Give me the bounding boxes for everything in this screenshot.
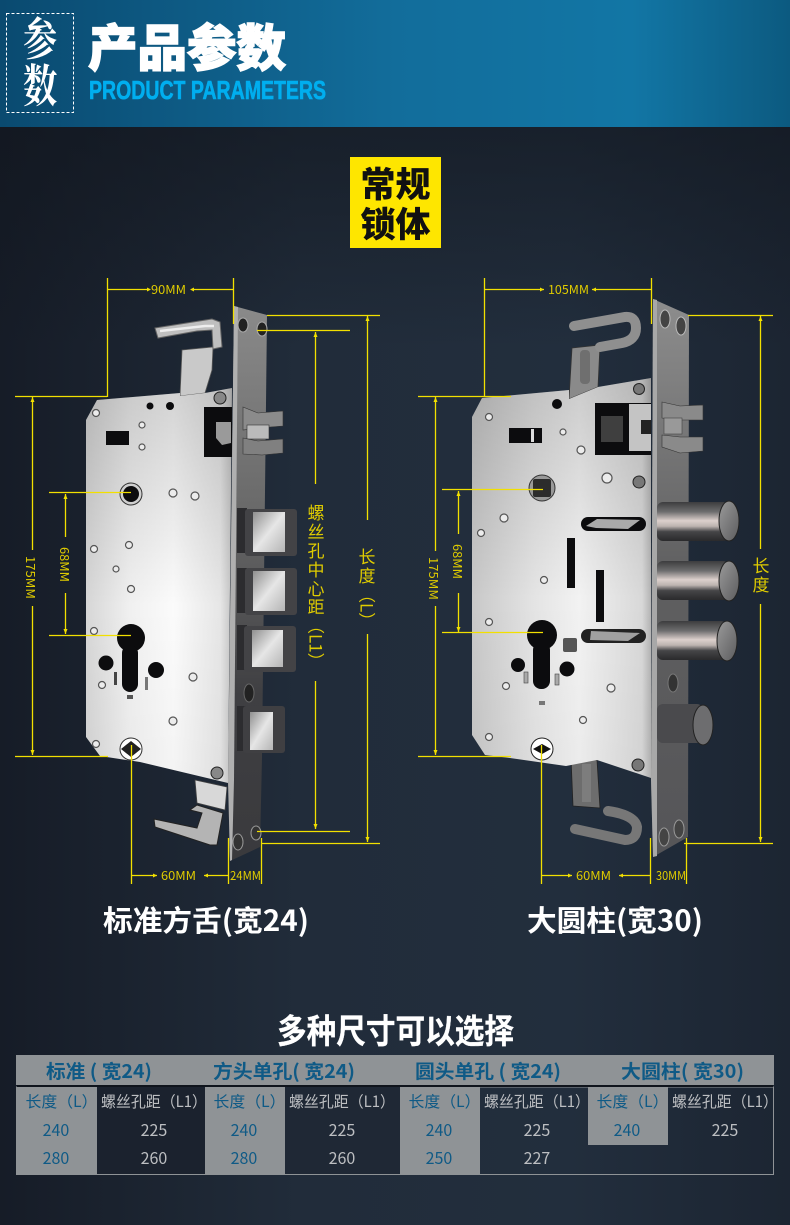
label: L: （L） (356, 586, 380, 629)
section heading: 多种尺寸可以选择 (277, 1004, 514, 1053)
faceplate screw holes (659, 310, 686, 846)
label: L1: 螺 (308, 499, 324, 524)
label: L1: 距 (308, 593, 324, 618)
bottom hook (571, 758, 637, 840)
badge: 常规锁体: 锁体 (360, 197, 431, 248)
bottom hook (154, 780, 227, 845)
steel plate (86, 388, 232, 783)
table headers: 圆头单孔 ( 宽24) (415, 1057, 561, 1084)
plate cut-outs (478, 384, 651, 771)
column: 圆头单孔: 螺丝孔距（L1） (484, 1090, 590, 1112)
label: L1: 孔 (308, 537, 324, 562)
top hook (569, 317, 636, 399)
label: 90MM: 90MM (151, 281, 186, 298)
table headers (46, 1057, 744, 1084)
faceplate (651, 299, 689, 857)
size table (16, 1055, 778, 1175)
column: 大圆柱 (596, 1090, 778, 1141)
table headers: 标准 ( 宽24) (46, 1057, 152, 1084)
label: L1 (304, 499, 330, 670)
table headers: 方头单孔( 宽24) (213, 1057, 355, 1084)
label: L: 度 (358, 562, 376, 587)
header banner (0, 0, 790, 127)
label: 60MM: 60MM (576, 867, 611, 884)
label: L: 长 (752, 552, 770, 577)
column: 标准: 280 (43, 1145, 69, 1169)
column: 大圆柱: 225 (712, 1117, 738, 1141)
column: 圆头单孔: 250 (426, 1145, 452, 1169)
column: 方头单孔: 225 (329, 1117, 355, 1141)
lock body: large cylinder bolt (472, 299, 739, 857)
column: 方头单孔 (214, 1090, 395, 1169)
badge: 常规锁体 (350, 157, 441, 248)
label: 60MM: 60MM (161, 867, 196, 884)
label: 30MM: 30MM (656, 867, 686, 884)
latch (243, 407, 283, 455)
top hook (155, 319, 222, 396)
column: 圆头单孔: 长度（L） (408, 1090, 480, 1112)
column: 标准: 260 (141, 1145, 167, 1169)
column: 方头单孔: 260 (329, 1145, 355, 1169)
column: 圆头单孔: 227 (524, 1145, 550, 1169)
dimensions: right lock (418, 278, 773, 884)
column: 方头单孔: 长度（L） (214, 1090, 286, 1112)
side tag: 参数 (6, 4, 74, 116)
title: 产品参数 (88, 9, 286, 81)
label: 68MM: 68MM (56, 547, 73, 582)
faceplate screw holes (233, 318, 267, 850)
column: 圆头单孔 (408, 1090, 590, 1169)
column: 标准: 螺丝孔距（L1） (101, 1090, 207, 1112)
column: 方头单孔: 280 (231, 1145, 257, 1169)
column: 方头单孔: 螺丝孔距（L1） (289, 1090, 395, 1112)
subtitle: PRODUCT PARAMETERS (89, 75, 326, 105)
badge: 常规锁体: 常规 (360, 157, 431, 208)
column: 标准 (26, 1090, 207, 1169)
label: L: 长 (358, 543, 376, 568)
cylinder bolts (657, 501, 739, 745)
column: 方头单孔: 240 (231, 1117, 257, 1141)
side tag: 参数: 参 (23, 4, 57, 69)
side tag: 参数: 数 (23, 51, 57, 116)
lock body: standard square bolt (86, 306, 297, 861)
column: 大圆柱: 长度（L） (596, 1090, 668, 1112)
label: 68MM: 68MM (449, 544, 466, 579)
column: 标准: 长度（L） (26, 1090, 98, 1112)
label: 105MM: 105MM (548, 281, 589, 298)
label: 175MM: 175MM (425, 557, 442, 600)
column: 标准: 225 (141, 1117, 167, 1141)
label: L: 度 (752, 571, 770, 596)
table headers: 大圆柱( 宽30) (621, 1057, 744, 1084)
square bolts (237, 508, 297, 753)
column: 大圆柱: 240 (614, 1117, 640, 1141)
column: 圆头单孔: 225 (524, 1117, 550, 1141)
label: L (356, 543, 380, 629)
caption: standard square bolt: 标准方舌(宽24) (103, 898, 309, 940)
label: L1: （L1） (304, 617, 330, 670)
caption: large cylinder: 大圆柱(宽30) (527, 898, 703, 940)
column: 圆头单孔: 240 (426, 1117, 452, 1141)
latch (662, 402, 703, 453)
label: 24MM: 24MM (230, 867, 261, 884)
plate cut-outs (90, 392, 232, 779)
label: 175MM: 175MM (22, 556, 39, 599)
label: L1: 丝 (308, 518, 324, 543)
steel plate (472, 378, 651, 778)
dimensions: left lock (15, 278, 380, 884)
label: L (752, 552, 770, 596)
column: 大圆柱: 螺丝孔距（L1） (672, 1090, 778, 1112)
column: 标准: 240 (43, 1117, 69, 1141)
faceplate (228, 306, 267, 861)
label: L1: 中 (308, 556, 324, 581)
label: L1: 心 (308, 575, 324, 600)
